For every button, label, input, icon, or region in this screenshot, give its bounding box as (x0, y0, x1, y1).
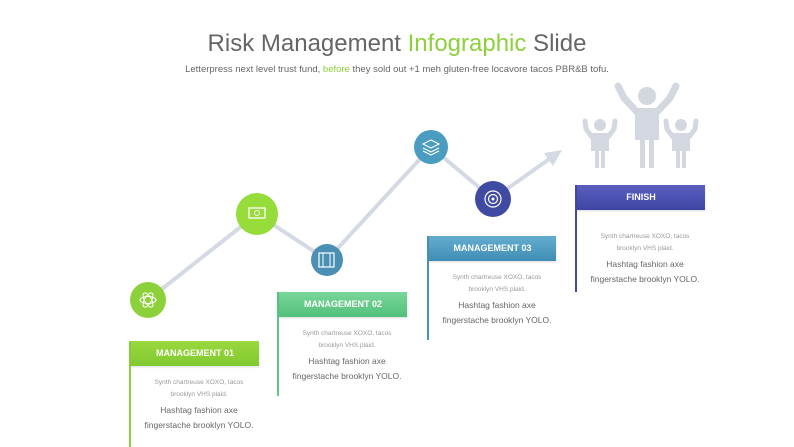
panel: management 02 (277, 292, 409, 396)
text finish: Synth chartreuse XOXO, tacos (601, 233, 689, 240)
panel: management 03 (427, 236, 559, 340)
node 4 layers (414, 130, 448, 164)
text 02: Synth chartreuse XOXO, tacos (303, 330, 391, 337)
panel: finish (575, 185, 707, 292)
text 03: brooklyn VHS plaid. (468, 286, 526, 293)
node 3 film (311, 244, 343, 276)
text 01: Synth chartreuse XOXO, tacos (155, 379, 243, 386)
header 03 (429, 236, 556, 261)
header finish (577, 185, 705, 210)
text 03: Synth chartreuse XOXO, tacos (453, 274, 541, 281)
header 01: MANAGEMENT 01 (156, 348, 234, 358)
text 03 (442, 274, 552, 325)
header 01 (131, 341, 259, 366)
header 03: MANAGEMENT 03 (453, 243, 532, 253)
text 01: fingerstache brooklyn YOLO. (144, 420, 254, 430)
text finish (590, 233, 700, 284)
text 02: brooklyn VHS plaid. (318, 342, 376, 349)
text finish: Hashtag fashion axe (606, 259, 684, 269)
text 03: fingerstache brooklyn YOLO. (442, 315, 552, 325)
node 2 money (236, 193, 278, 235)
text finish: brooklyn VHS plaid. (616, 245, 674, 252)
text 01: brooklyn VHS plaid. (170, 391, 228, 398)
node 1 atom (130, 282, 166, 318)
node 5 target (475, 181, 511, 217)
trend line (148, 147, 562, 300)
header 02: MANAGEMENT 02 (304, 299, 382, 309)
panel: management 01 (129, 341, 261, 447)
text 02 (292, 330, 402, 381)
title: Risk Management Infographic Slide (208, 30, 586, 57)
text 01 (144, 379, 254, 430)
text 02: Hashtag fashion axe (308, 356, 386, 366)
text 03: Hashtag fashion axe (458, 300, 536, 310)
text finish: fingerstache brooklyn YOLO. (590, 274, 700, 284)
icon: people celebrating (585, 86, 696, 168)
subtitle: Letterpress next level trust fund, before they sold out +1 meh gluten-free locavore tacos PBR&B tofu. (185, 64, 609, 75)
header 02 (279, 292, 407, 317)
text 01: Hashtag fashion axe (160, 405, 238, 415)
text 02: fingerstache brooklyn YOLO. (292, 371, 402, 381)
header finish: FINISH (626, 192, 656, 202)
